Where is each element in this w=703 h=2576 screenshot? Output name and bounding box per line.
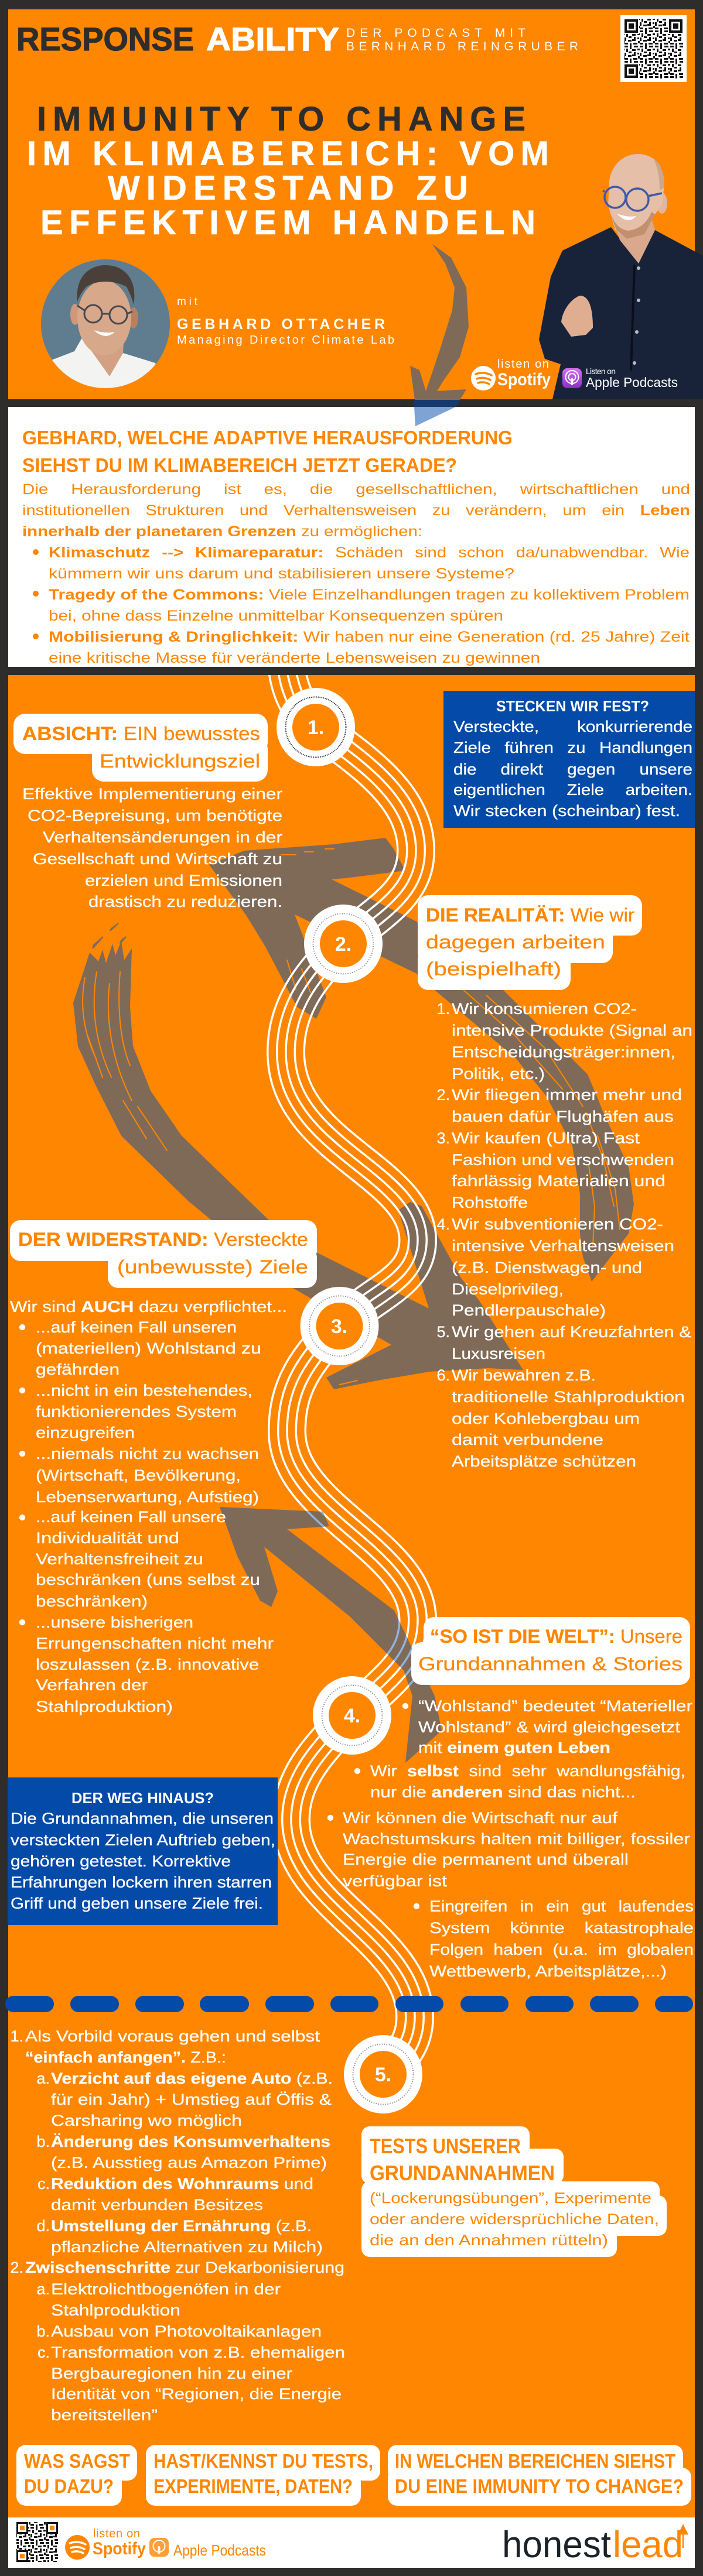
list: Die Realität examples: Arbeitsplätze schützen [452,1453,636,1470]
list: concrete tests and steps: b. [36,2322,50,2340]
text: Absicht description [22,785,282,910]
list: hidden goals: beschränken (uns selbst zu [36,1571,260,1588]
panel: process map [8,675,695,2517]
guest name: mit [177,296,198,308]
list: concrete tests and steps: Umstellung der Ernährung (z.B. [51,2217,312,2235]
list: Die Realität examples: Rohstoffe [452,1194,528,1211]
question box 3 [388,2445,691,2506]
list: Die Realität examples: Wir kaufen (Ultra) Fast [452,1129,640,1147]
heading: SIEHST DU IM KLIMABEREICH JETZT GERADE? [22,454,457,476]
list: concrete tests and steps: Reduktion des Wohnraums und [51,2175,313,2193]
arrow: brush arrow into white panel [410,244,469,426]
list: assumptions: Wohlstand” & wird gleichgesetzt [418,1718,681,1736]
step 1 marker [277,688,355,766]
list: Die Realität examples: Wir bewahren z.B. [452,1366,596,1384]
callout: Tests unserer Grundannahmen: (“Lockerungsübungen”, Experimente [370,2189,651,2207]
list: Die Realität examples: Politik, etc.) [452,1065,545,1083]
question box 2: EXPERIMENTE, DATEN? [153,2475,353,2497]
icon: Spotify [471,358,551,390]
text: Absicht description: drastisch zu reduzieren. [88,893,282,910]
step 4 marker [313,1676,391,1755]
question box 2: HAST/KENNST DU TESTS, [153,2450,373,2472]
bullet list: Mobilisierung & Dringlichkeit: Wir haben nur eine Generation (rd. 25 Jahre) Zeit [49,629,690,645]
list: hidden goals: ...nicht in ein bestehendes, [36,1382,252,1399]
question box 2 [146,2445,380,2506]
list: concrete tests and steps: Transformation von z.B. ehemaligen [51,2344,345,2361]
callout: stecken wir fest [443,691,695,828]
text: Absicht description: Verhaltensänderungen in der [43,828,282,846]
list: Die Realität examples: Dieselprivileg, [452,1280,564,1298]
blue dashed divider [5,1996,693,2012]
list: Die Realität examples: Fashion und verschwenden [452,1151,674,1169]
step 4 marker: 4. [344,1705,360,1727]
list: hidden goals: Individualität und [36,1529,179,1547]
callout: Absicht heading [13,714,268,782]
question box 3: DU EINE IMMUNITY TO CHANGE? [395,2475,684,2497]
list: hidden goals: Errungenschaften nicht mehr [36,1635,274,1652]
callout: stecken wir fest: Ziele führen zu Handlungen [453,739,692,756]
question box 3: IN WELCHEN BEREICHEN SIEHST [395,2450,675,2472]
title: IMMUNITY TO CHANGE [37,100,525,138]
list: hidden goals: Lebenserwartung, Aufstieg) [36,1488,259,1506]
callout: Tests unserer Grundannahmen [361,2126,667,2257]
list: hidden goals: gefährden [36,1361,120,1378]
bullet list [33,544,690,666]
list: assumptions: Energie die permanent und überall [343,1851,629,1868]
list: concrete tests and steps: a. [36,2280,50,2298]
list: assumptions: Wachstumskurs halten mit billiger, fossiler [343,1830,690,1848]
callout: stecken wir fest: eigentlichen Ziele arbeiten. [453,781,692,799]
list: assumptions: verfügbar ist [343,1872,448,1890]
list: hidden goals: Verhaltensfreiheit zu [36,1550,203,1568]
title: EFFEKTIVEM HANDELN [40,204,535,242]
list: Die Realität examples: Wir subventionieren CO2- [452,1215,663,1233]
list: hidden goals: (Wirtschaft, Bevölkerung, [36,1467,241,1484]
heading [22,427,513,476]
list: concrete tests and steps: damit verbunden Besitzes [51,2196,263,2214]
QR code top [620,15,687,82]
list: Die Realität examples: oder Kohlebergbau um [452,1410,640,1427]
podcast tagline [346,26,578,53]
list: Die Realität examples: (z.B. Dienstwagen- und [452,1259,642,1276]
callout: der Weg hinaus: Erfahrungen lockern ihren starren [11,1873,272,1891]
list: assumptions: mit einem guten Leben [418,1739,610,1756]
title: WIDERSTAND ZU [108,169,468,207]
callout: So ist die Welt heading: “SO IST DIE WELT”: Unsere [430,1626,682,1647]
list: hidden goals: loszulassen (z.B. innovative [36,1656,259,1673]
list: hidden goals: ...auf keinen Fall unseren [36,1318,237,1336]
podcast tagline: BERNHARD REINGRUBER [346,40,578,53]
bullet list: Tragedy of the Commons: Viele Einzelhandlungen tragen zu kollektivem Problem [49,587,690,603]
callout: Der Widerstand heading: (unbewusste) Ziele [117,1256,308,1277]
list: concrete tests and steps: b. [36,2133,50,2150]
list: assumptions: Eingreifen in ein gut laufendes [429,1897,694,1915]
list: Die Realität examples: Entscheidungsträger:innen, [452,1043,675,1061]
icon: Spotify: Spotify [497,370,551,389]
callout: Tests unserer Grundannahmen: TESTS UNSERER [370,2134,521,2158]
callout: der Weg hinaus: versteckten Zielen Auftrieb geben, [11,1831,275,1849]
callout: stecken wir fest: Versteckte, konkurrierende [453,718,692,735]
step 3 marker: 3. [331,1316,347,1338]
title [27,100,549,242]
callout: der Weg hinaus [8,1777,278,1925]
icon: Spotify: listen on [497,358,549,371]
footer Apple Podcasts: Apple Podcasts [173,2541,266,2559]
list: hidden goals: Wir sind AUCH dazu verpflichtet... [10,1298,287,1316]
list: Die Realität examples: intensive Produkte (Signal an [452,1022,692,1039]
callout: Die Realität heading: dagegen arbeiten [426,931,605,953]
wavy lines seen through arrow [306,1510,414,1687]
list: concrete tests and steps: pflanzliche Alternativen zu Milch) [51,2238,323,2256]
list: concrete tests and steps: Ausbau von Photovoltaikanlagen [51,2322,322,2340]
list: hidden goals: Verfahren der [36,1676,148,1694]
list: Die Realität examples: 2. [436,1086,450,1104]
arrow: brush arrow from assumptions to goals (2 to 1) [209,838,634,1282]
list: concrete tests and steps [10,2027,345,2424]
callout: stecken wir fest: STECKEN WIR FEST? [496,697,649,715]
podcast name: ABILITY [206,20,339,57]
list: Die Realität examples: Pendlerpauschale) [452,1301,606,1319]
list: concrete tests and steps: Bergbauregionen hin zu einer [51,2365,292,2382]
list: concrete tests and steps: 1. [10,2027,23,2045]
step 1 marker: 1. [308,717,324,739]
callout: stecken wir fest: die direkt gegen unsere [453,761,692,778]
list: hidden goals: ...niemals nicht zu wachsen [36,1445,259,1462]
callout: Die Realität heading [418,895,642,990]
callout: Der Widerstand heading: DER WIDERSTAND: Versteckte [18,1229,308,1250]
list: assumptions: Wir selbst sind sehr wandlungsfähig, [370,1762,685,1780]
title: IM KLIMABEREICH: VOM [27,135,549,173]
intro paragraph: institutionellen Strukturen und Verhaltensweisen zu verändern, um ein Leben [22,502,690,519]
text: Absicht description: Effektive Implementierung einer [22,785,282,803]
bullet list: bei, ohne dass Einzelne unmittelbar Konsequenzen spüren [49,608,503,624]
list: Die Realität examples: 1. [436,1000,450,1018]
intro paragraph: innerhalb der planetaren Grenzen zu ermöglichen: [22,523,422,540]
guest portrait [41,259,170,388]
step 5 marker [344,2035,422,2113]
callout: der Weg hinaus: gehören getestet. Korrektive [11,1852,231,1870]
callout: Tests unserer Grundannahmen: oder andere widersprüchliche Daten, [370,2210,659,2228]
question box 1: WAS SAGST [24,2450,130,2472]
list: Die Realität examples: 6. [436,1366,450,1384]
question box 1: DU DAZU? [24,2475,114,2497]
list: Die Realität examples: 5. [436,1323,450,1341]
list: concrete tests and steps: Stahlproduktion [51,2301,180,2319]
callout: stecken wir fest: Wir stecken (scheinbar) fest. [453,802,680,820]
intro paragraph: Die Herausforderung ist es, die gesellschaftlichen, wirtschaftlichen und [22,481,690,498]
step 2 marker: 2. [335,933,352,955]
list: concrete tests and steps: “einfach anfangen”. Z.B.: [25,2049,226,2066]
list: concrete tests and steps: Identität von “Regionen, die Energie [51,2385,342,2403]
list: Die Realität examples: Luxusreisen [452,1345,545,1362]
list: concrete tests and steps: 2. [10,2259,23,2276]
callout: der Weg hinaus: Griff und geben unsere Ziele frei. [11,1895,263,1912]
guest name: Managing Director Climate Lab [177,334,394,347]
list: assumptions: “Wohlstand” bedeutet “Materieller [418,1697,692,1715]
host portrait [539,154,703,399]
list: concrete tests and steps: für ein Jahr) + Umstieg auf Öffis & [51,2091,332,2108]
list: concrete tests and steps: Elektrolichtbogenöfen in der [51,2280,281,2298]
list: concrete tests and steps: d. [36,2217,50,2235]
list: hidden goals: (materiellen) Wohlstand zu [36,1340,261,1357]
list: concrete tests and steps: a. [36,2070,50,2087]
honestlead logo: honest [502,2523,611,2565]
icon: Apple Podcasts: Listen on [586,366,616,376]
podcast tagline: DER PODCAST MIT [346,26,525,40]
footer bar [8,2517,695,2568]
callout: Die Realität heading: (beispielhaft) [426,958,561,979]
callout: So ist die Welt heading: Grundannahmen & Stories [418,1653,682,1674]
list: assumptions: Wettbewerb, Arbeitsplätze,...) [429,1962,667,1980]
callout: Absicht heading: Entwicklungsziel [100,751,260,772]
list: Die Realität examples [436,1000,692,1470]
list: Die Realität examples: traditionelle Stahlproduktion [452,1388,685,1406]
callout: Absicht heading: ABSICHT: EIN bewusstes [22,723,260,744]
panel: adaptive challenge [8,407,695,667]
callout: der Weg hinaus: DER WEG HINAUS? [71,1789,214,1807]
callout: So ist die Welt heading [411,1617,690,1685]
guest name [177,296,394,347]
footer Apple Podcasts [149,2538,266,2559]
step 3 marker [300,1287,378,1365]
honestlead logo: lead [613,2523,683,2565]
list: assumptions: nur die anderen sind das nicht... [370,1783,636,1801]
list: assumptions: Folgen haben (u.a. im globalen [429,1941,694,1958]
footer Spotify [65,2527,146,2560]
list: Die Realität examples: bauen dafür Flughäfen aus [452,1108,674,1125]
list: concrete tests and steps: Zwischenschritte zur Dekarbonisierung [25,2259,344,2276]
list: assumptions: Wir können die Wirtschaft nur auf [343,1809,618,1827]
list: hidden goals [10,1298,287,1715]
list: concrete tests and steps: Verzicht auf das eigene Auto (z.B. [51,2070,333,2087]
list: hidden goals: ...unsere bisherigen [36,1614,193,1631]
callout: Tests unserer Grundannahmen: die an den Annahmen rütteln) [370,2231,608,2249]
icon: Apple Podcasts: Apple Podcasts [586,375,678,390]
panel: podcast header [8,9,703,399]
guest name: GEBHARD OTTACHER [177,316,385,333]
podcast name [16,20,339,57]
list: concrete tests and steps: c. [37,2175,50,2193]
list: concrete tests and steps: Carsharing wo möglich [51,2112,242,2129]
list: concrete tests and steps: (z.B. Ausstieg aus Amazon Prime) [51,2154,327,2171]
footer Spotify: listen on [93,2527,140,2540]
list: hidden goals: funktionierendes System [36,1403,237,1420]
footer Spotify: Spotify [93,2539,146,2558]
list: hidden goals: ...auf keinen Fall unsere [36,1508,226,1526]
callout: der Weg hinaus: Die Grundannahmen, die unseren [11,1810,274,1827]
bullet list: kümmern wir uns darum und stabilisieren unsere Systeme? [49,566,514,582]
list: hidden goals: Stahlproduktion) [36,1698,173,1715]
callout: Tests unserer Grundannahmen: GRUNDANNAHMEN [370,2161,555,2185]
bullet list: eine kritische Masse für veränderte Lebensweisen zu gewinnen [49,650,540,666]
list: Die Realität examples: Wir gehen auf Kreuzfahrten & [452,1323,691,1341]
heading: GEBHARD, WELCHE ADAPTIVE HERAUSFORDERUNG [22,427,513,448]
list: concrete tests and steps: Als Vorbild voraus gehen und selbst [25,2027,320,2045]
list: Die Realität examples: 3. [436,1129,450,1147]
arrow: brush arrow from goal to resistance (1 to 3) [73,923,523,1389]
question box 1 [16,2445,137,2506]
text: Absicht description: CO2-Bepreisung, um benötigte [28,807,282,824]
bullet list: Klimaschutz --> Klimareparatur: Schäden sind schon da/unabwendbar. Wie [49,544,690,561]
list: concrete tests and steps: Änderung des Konsumverhaltens [51,2133,330,2150]
podcast name: RESPONSE [16,20,194,57]
list: Die Realität examples: damit verbundene [452,1431,603,1448]
list: Die Realität examples: fahrlässig Materialien und [452,1172,666,1190]
list: hidden goals: einzugreifen [36,1424,135,1441]
callout: Der Widerstand heading [10,1220,317,1288]
footer QR code [16,2522,58,2562]
intro paragraph [22,481,690,540]
arrow: brush arrow from assumptions to resistance (4 to 3) [220,1507,442,1763]
list: Die Realität examples: intensive Verhaltensweisen [452,1237,674,1255]
text: Absicht description: erzielen und Emissionen [85,872,282,889]
list: assumptions: System könnte katastrophale [429,1919,694,1937]
honestlead logo [502,2523,687,2565]
step 2 marker [304,905,383,983]
wavy path lines [267,675,437,2062]
list: hidden goals: beschränken) [36,1592,148,1610]
step 5 marker: 5. [375,2064,391,2086]
icon: Apple Podcasts [562,366,678,390]
list: concrete tests and steps: c. [37,2344,50,2361]
text: Absicht description: Gesellschaft und Wirtschaft zu [33,850,282,868]
list: assumptions [327,1697,694,1980]
callout: Die Realität heading: DIE REALITÄT: Wie wir [426,905,634,926]
list: Die Realität examples: 4. [436,1215,450,1233]
list: concrete tests and steps: bereitstellen” [51,2406,158,2424]
list: Die Realität examples: Wir konsumieren CO2- [452,1000,637,1018]
list: Die Realität examples: Wir fliegen immer mehr und [452,1086,682,1104]
